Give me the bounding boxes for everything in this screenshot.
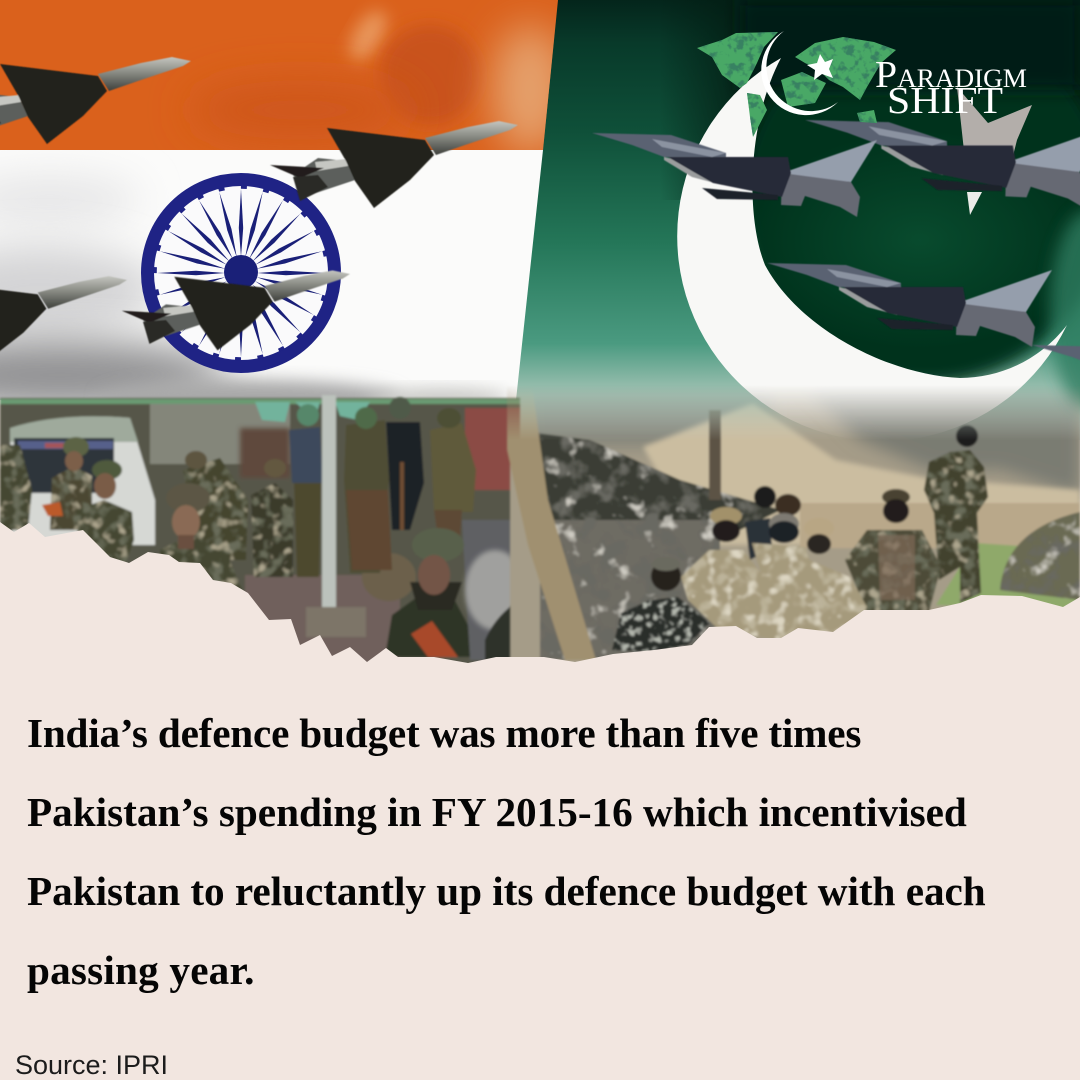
icon: flag star [957,87,1032,215]
icon: logo crescent [761,31,838,115]
soldier: centre hooded [752,513,833,640]
logo wordmark: Shift: SHIFT [887,80,1003,122]
text block: main statement: passing year. [27,947,255,993]
fighter jets: Pakistan [592,120,1080,429]
pole on field [709,410,721,500]
soldier: front with rifle [385,528,470,657]
rocks [462,520,540,660]
icon: flag crescent [677,58,1067,441]
text block: main statement: Pakistan’s spending in FY 2015-16 which incentivised [27,789,967,835]
soldier: front left dark camo [612,557,710,652]
text block: main statement: Pakistan to reluctantly up its defence budget with each [27,868,986,914]
soldier: tan left [681,507,781,640]
jet: upper left [592,133,877,217]
man in dark [386,397,424,530]
banners [255,402,370,422]
man in olive jacket [430,408,476,538]
man in olive and brown [344,407,392,573]
icon: world map [697,32,896,137]
source note: Source: IPRI [15,1050,168,1080]
soldier: far left [0,445,32,530]
text block: main statement [27,710,986,993]
torn paper panel [0,522,1080,1080]
jet: edge [1032,345,1080,429]
pole [322,395,336,607]
fighter jets: India [0,57,518,360]
text block: main statement: India’s defence budget was more than five times [27,710,861,756]
photo: Pakistani soldiers on hillside [507,385,1080,670]
logo: Paradigm Shift [697,31,1027,137]
jet: top left [0,57,191,144]
jet: lower [767,263,1052,347]
boulders [540,520,720,660]
truck [10,416,155,545]
soldier: right of truck [42,460,134,565]
jet: upper right [805,120,1080,209]
soldier: centre front [160,483,245,596]
grass [936,543,1080,610]
jet: lower left [0,276,127,360]
panel: Pakistan flag [515,0,1080,441]
soldier: standing lookout [924,425,988,603]
dark bushes [530,432,781,530]
soldier: back right [845,489,941,612]
flag band: saffron [0,0,568,155]
icon: Ashoka chakra [148,180,334,366]
photo: Indian soldiers [0,395,540,670]
flag band: white [0,150,543,400]
jet: over chakra [122,270,350,350]
soldiers background group [183,397,476,577]
treeline left [536,400,766,453]
concrete base [306,607,366,637]
man in blue [289,404,323,577]
icon: logo star [807,54,833,80]
soldier: helmet left [50,437,92,530]
logo wordmark: Paradigm: PARADIGM [875,54,1027,96]
ground [245,575,400,670]
treeline right [826,396,1080,496]
soldier: tan right [806,532,868,631]
jet: centre right [270,121,518,208]
tree trunk [507,385,596,660]
tan field [643,403,1080,545]
lower field band [800,503,1080,548]
panel: India flag [0,0,568,416]
photo collage [0,0,1080,663]
soldier: behind group [745,486,801,560]
